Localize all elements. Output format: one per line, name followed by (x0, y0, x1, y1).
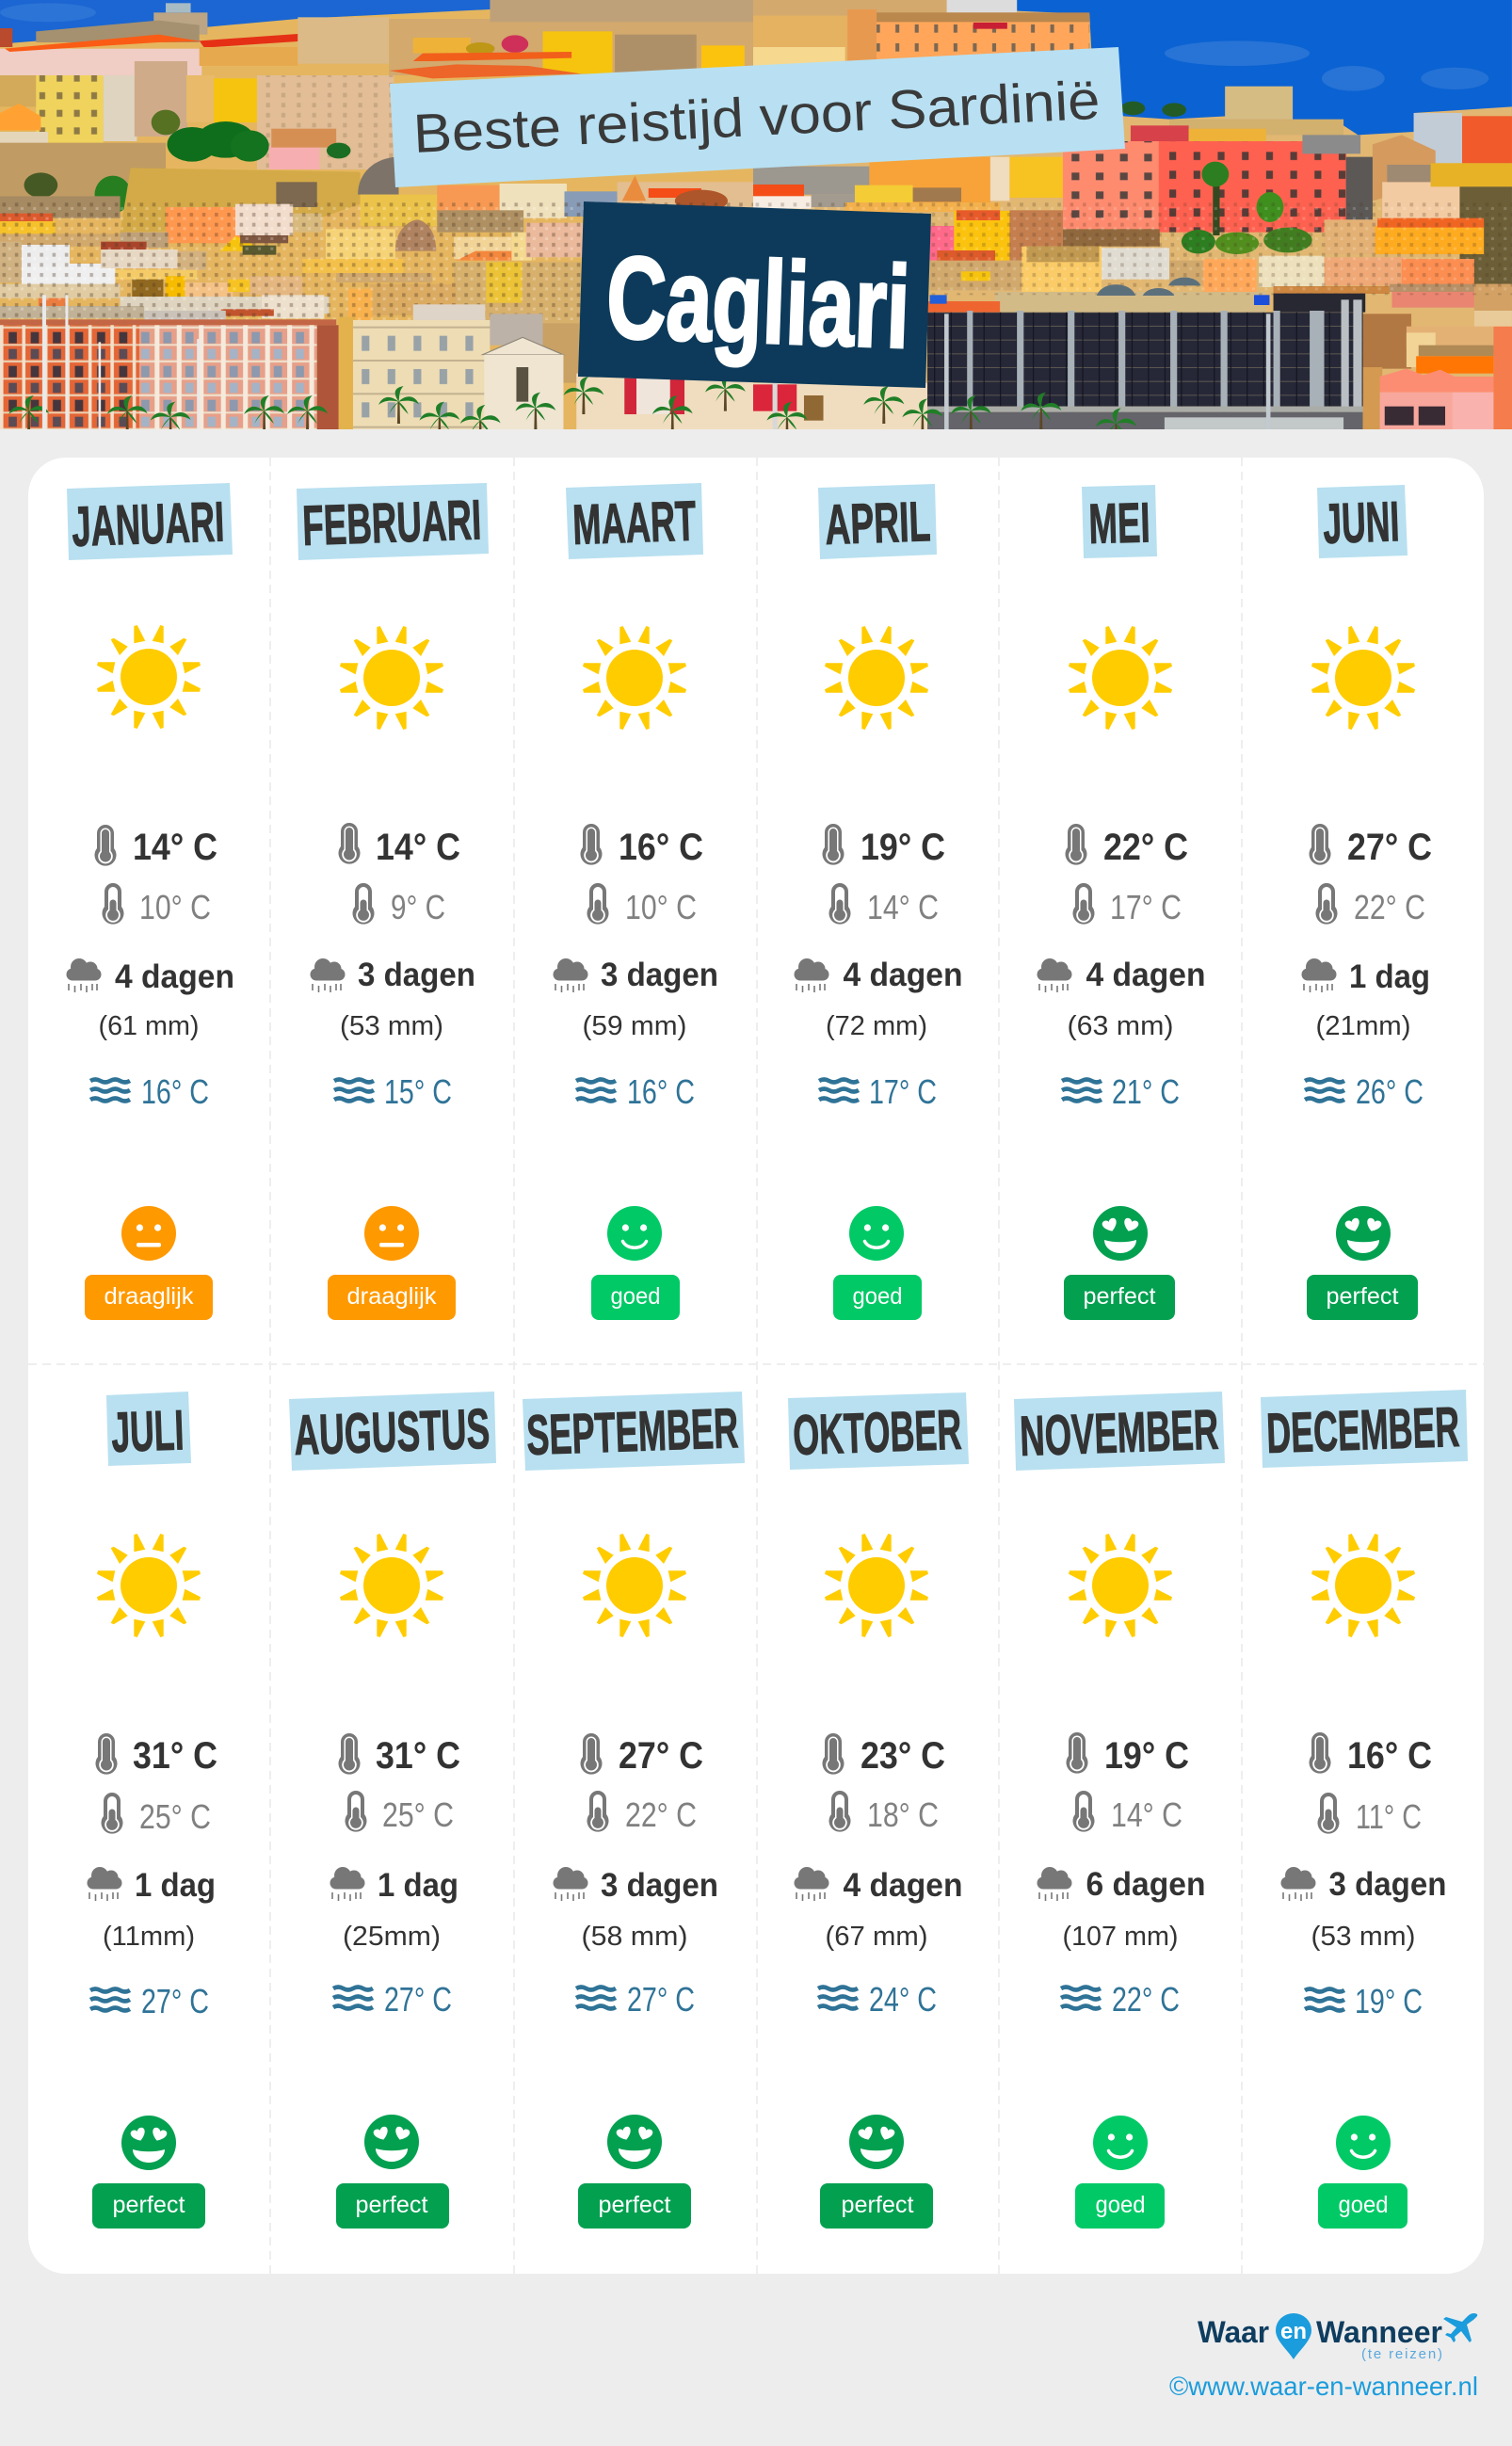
rating: perfect (1064, 1206, 1175, 1320)
month label: oktober (788, 1392, 969, 1470)
rating: perfect: perfect (1083, 1283, 1156, 1310)
stats: november (1037, 1732, 1205, 2019)
stats: september: 3 dagen (601, 1867, 718, 1904)
stats: december: 3 dagen (1329, 1866, 1446, 1903)
month column: maart (554, 483, 718, 1320)
stats: augustus: (25mm) (343, 1922, 441, 1952)
month label: september (523, 1392, 745, 1471)
month label: november (1014, 1392, 1225, 1471)
icon: airplane (1443, 2313, 1477, 2342)
header photo: Cagliari city view (0, 0, 1512, 445)
stats: juni: 22° C (1354, 888, 1425, 926)
stats: april: 4 dagen (844, 957, 962, 993)
title banner: Beste reistijd voor Sardinië: Beste reistijd voor Sardinië (411, 70, 1102, 165)
stats: mei: 21° C (1112, 1072, 1180, 1111)
stats: februari: 9° C (391, 888, 445, 926)
rating: perfect (820, 2115, 933, 2229)
month column: februari (297, 483, 489, 1320)
panel: climate table card (28, 458, 1484, 2274)
stats: juni: 27° C (1347, 827, 1432, 868)
month label: oktober: OKTOBER (792, 1398, 962, 1467)
rating: perfect: perfect (599, 2192, 671, 2218)
icon: sun (340, 1534, 443, 1637)
stats: april: 17° C (869, 1072, 937, 1111)
rating: goed (591, 1206, 680, 1320)
month label: februari: FEBRUARI (301, 488, 482, 557)
icon: sun (97, 1534, 201, 1637)
rating: perfect: perfect (356, 2192, 428, 2218)
rating: draaglijk (85, 1206, 213, 1320)
stats: december: 16° C (1347, 1735, 1432, 1777)
stats: juli (87, 1733, 217, 2020)
rating: draaglijk: draaglijk (346, 1283, 437, 1310)
logo: Waar en Wanneer: Waar (1198, 2315, 1269, 2349)
month column: augustus (289, 1392, 496, 2229)
rating: perfect: perfect (842, 2192, 914, 2218)
icon: sun (97, 625, 201, 729)
stats: oktober: 24° C (869, 1980, 937, 2019)
stats: januari: 4 dagen (115, 958, 234, 995)
month label: januari: JANUARI (71, 490, 225, 558)
stats: augustus: 27° C (384, 1980, 452, 2019)
icon: sun (825, 626, 928, 730)
month label: februari (297, 483, 489, 560)
stats: november: 19° C (1104, 1735, 1189, 1777)
month column: december (1261, 1390, 1468, 2229)
icon: sun (340, 626, 443, 730)
stats: februari (311, 823, 475, 1111)
month label: april: APRIL (824, 490, 931, 556)
stats: september: (58 mm) (581, 1922, 688, 1952)
stats: juli: 31° C (133, 1735, 217, 1777)
title banner: Beste reistijd voor Sardinië (390, 47, 1125, 187)
icon: sun (1311, 626, 1415, 730)
icon: location pin (1276, 2313, 1311, 2359)
source link: ©www.waar-en-wanneer.nl (1169, 2372, 1478, 2401)
logo: Waar en Wanneer (1198, 2313, 1477, 2362)
stats: augustus: 25° C (382, 1795, 454, 1834)
month column: januari (66, 483, 234, 1320)
icon: location pin: en (1280, 2319, 1307, 2344)
rating: draaglijk (328, 1206, 456, 1320)
month column: oktober (788, 1392, 969, 2229)
icon: sun (583, 1534, 686, 1637)
stats: december (1280, 1732, 1446, 2020)
stats: juli: 1 dag (135, 1867, 216, 1904)
month label: maart (566, 483, 703, 559)
stats: augustus (330, 1733, 460, 2019)
stats: december: 11° C (1356, 1797, 1422, 1836)
stats: november: 6 dagen (1086, 1866, 1205, 1903)
rating: goed: goed (1096, 2192, 1145, 2218)
stats: oktober: (67 mm) (826, 1922, 927, 1952)
rating: perfect: perfect (113, 2192, 185, 2218)
stats: januari: 16° C (141, 1072, 209, 1111)
stats: september (554, 1733, 718, 2019)
month label: september: SEPTEMBER (525, 1396, 739, 1467)
stats: februari: 3 dagen (358, 957, 475, 993)
month label: mei (1082, 485, 1157, 558)
rating: perfect (92, 2116, 205, 2229)
month label: april (818, 484, 937, 559)
stats: juni: 1 dag (1349, 958, 1430, 995)
stats: april: (72 mm) (826, 1011, 927, 1041)
month label: augustus (289, 1392, 496, 1471)
rating: goed: goed (853, 1283, 902, 1310)
month column: juli (87, 1392, 217, 2229)
rating: perfect (578, 2115, 691, 2229)
stats: mei: 17° C (1110, 888, 1182, 926)
icon: sun (1069, 1534, 1172, 1637)
stats: juni: (21mm) (1316, 1011, 1410, 1041)
stats: juni: 26° C (1356, 1072, 1424, 1111)
rating: draaglijk: draaglijk (104, 1283, 194, 1310)
stats: april: 14° C (867, 888, 939, 926)
stats: februari: (53 mm) (340, 1011, 443, 1041)
rating: goed (1075, 2116, 1165, 2229)
stats: december: 19° C (1355, 1982, 1423, 2020)
month column: september (523, 1392, 745, 2229)
stats: mei: (63 mm) (1067, 1011, 1174, 1041)
month label: juni (1317, 485, 1407, 558)
stats: maart: 3 dagen (601, 957, 718, 993)
icon: sun (825, 1534, 928, 1637)
stats: mei: 22° C (1103, 827, 1188, 868)
city banner: Cagliari (578, 201, 931, 388)
stats: maart: 10° C (625, 888, 697, 926)
stats: september: 27° C (627, 1980, 695, 2019)
stats: oktober: 4 dagen (844, 1867, 962, 1904)
stats: november: 14° C (1111, 1795, 1182, 1834)
month label: juli: JULI (110, 1398, 185, 1464)
stats: april (795, 824, 962, 1111)
stats: november: 22° C (1112, 1980, 1180, 2019)
icon: sun (1069, 626, 1172, 730)
month column: april (795, 484, 962, 1320)
month label: mei: MEI (1088, 491, 1150, 555)
stats: oktober (795, 1733, 962, 2019)
stats: maart: 16° C (627, 1072, 695, 1111)
month column: mei (1037, 485, 1205, 1320)
stats: maart: 16° C (619, 827, 703, 868)
stats: oktober: 18° C (867, 1795, 939, 1834)
rating: perfect (336, 2115, 449, 2229)
city banner: Cagliari: Cagliari (604, 233, 912, 373)
stats: augustus: 31° C (376, 1735, 460, 1777)
month column: november (1014, 1392, 1225, 2229)
logo: Waar en Wanneer: (te reizen) (1361, 2346, 1442, 2362)
rating: goed: goed (1339, 2192, 1388, 2218)
stats: september: 22° C (625, 1795, 697, 1834)
stats: januari: 14° C (133, 827, 217, 868)
month label: juli (106, 1392, 191, 1466)
icon: sun (583, 626, 686, 730)
stats: november: (107 mm) (1062, 1922, 1179, 1952)
stats: juli: (11mm) (103, 1922, 195, 1952)
stats: januari (66, 825, 234, 1111)
stats: maart: (59 mm) (582, 1011, 687, 1041)
stats: juni (1301, 824, 1432, 1111)
stats: januari: (61 mm) (98, 1011, 200, 1041)
month label: maart: MAART (571, 489, 697, 556)
stats: maart (554, 824, 718, 1111)
rating: perfect (1307, 1206, 1418, 1320)
stats: oktober: 23° C (861, 1735, 945, 1777)
logo: Waar en Wanneer: Wanneer (1316, 2315, 1442, 2349)
month column: juni (1301, 485, 1432, 1320)
stats: december: (53 mm) (1311, 1922, 1416, 1952)
stats: september: 27° C (619, 1735, 703, 1777)
stats: februari: 14° C (376, 827, 460, 868)
month label: november: NOVEMBER (1019, 1398, 1219, 1468)
stats: januari: 10° C (139, 888, 211, 926)
rating: goed: goed (610, 1283, 661, 1310)
stats: mei: 4 dagen (1086, 957, 1205, 993)
stats: juli: 27° C (141, 1982, 209, 2020)
rating: goed (1318, 2116, 1407, 2229)
stats: mei (1037, 824, 1205, 1111)
stats: februari: 15° C (384, 1072, 452, 1111)
stats: juli: 25° C (139, 1797, 211, 1836)
rating: perfect: perfect (1326, 1283, 1399, 1310)
month label: januari (67, 483, 233, 560)
stats: april: 19° C (861, 827, 945, 868)
month label: juni: JUNI (1322, 490, 1400, 555)
month label: augustus: AUGUSTUS (293, 1397, 491, 1467)
icon: sun (1311, 1534, 1415, 1637)
rating: goed (833, 1206, 922, 1320)
stats: augustus: 1 dag (378, 1867, 458, 1904)
